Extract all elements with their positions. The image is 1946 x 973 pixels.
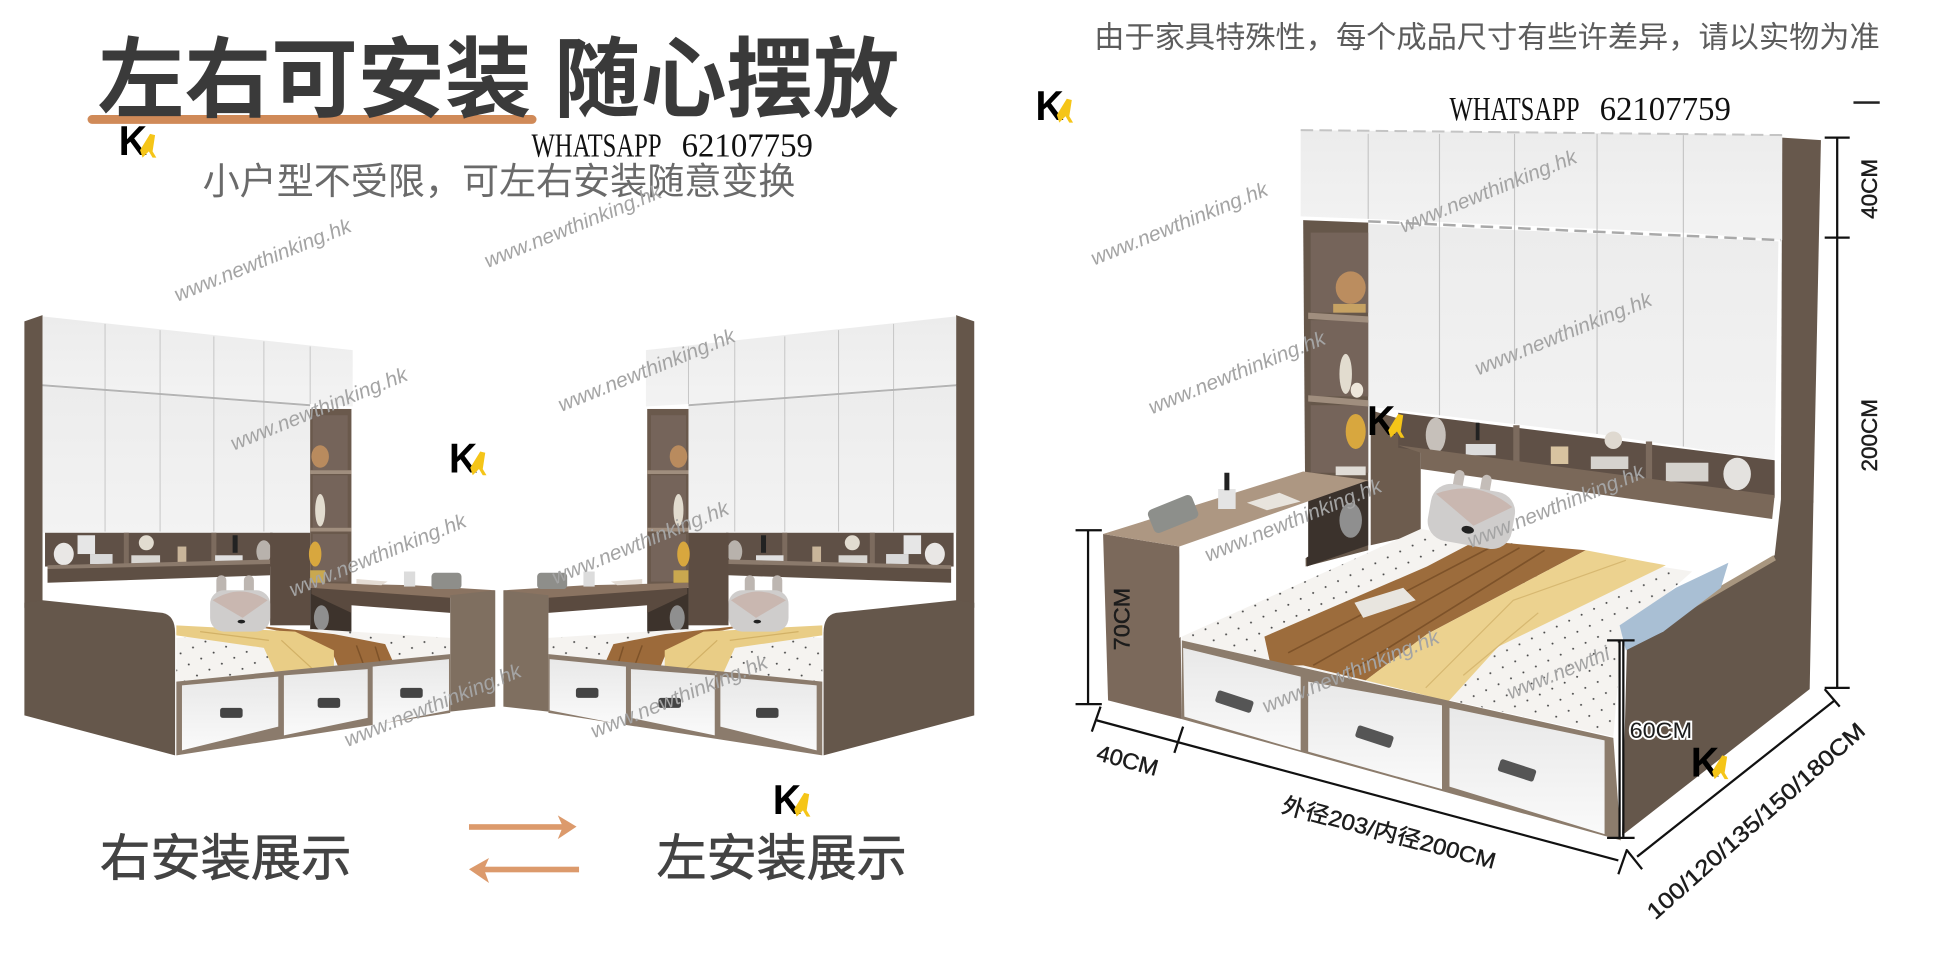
shelf niche <box>45 533 289 583</box>
watermark text group: www.newthinking.hk <box>171 214 356 306</box>
logo 4: K <box>773 777 801 823</box>
watermark text group: www.newthinking.hk <box>286 509 471 602</box>
desk <box>1103 471 1368 719</box>
watermark text group: www.newthinking.hk <box>481 180 666 273</box>
logo 5: K <box>1367 398 1395 444</box>
blue pillows <box>1620 563 1728 650</box>
text: size disclaimer: 由于家具特殊性，每个成品尺寸有些许差异，请以实物为准 <box>1094 22 1880 55</box>
top cabinet <box>43 316 353 406</box>
text: whatsapp left <box>532 127 813 164</box>
text: whatsapp left: 62107759 <box>682 127 813 164</box>
yellow blanket <box>176 625 334 675</box>
desk <box>310 572 495 712</box>
heading: main title: 左右可安装 <box>98 31 532 129</box>
shelf niche <box>1398 413 1775 519</box>
arrow: to right <box>469 815 577 839</box>
heading: main title: 随心摆放 <box>554 31 899 129</box>
dimension label: 40CM top: 40CM <box>1857 159 1882 219</box>
deer pillow <box>1424 466 1521 552</box>
watermark text group: www.newthinking.hk <box>1259 625 1444 718</box>
text: whatsapp left: WHATSAPP <box>532 127 662 164</box>
watermark text group: www.newthinking.hk <box>1464 460 1649 553</box>
top cabinet <box>1301 130 1782 240</box>
drawer frame <box>1182 640 1621 840</box>
text: subtitle: 小户型不受限，可左右安装随意变换 <box>203 160 795 202</box>
tall side post <box>24 315 43 608</box>
illustration: right-install bed <box>24 315 495 755</box>
side panel <box>24 600 175 755</box>
heading: title underline <box>88 115 537 124</box>
text: whatsapp right: 62107759 <box>1600 91 1731 128</box>
under-desk recess <box>1307 473 1368 567</box>
brown blanket <box>1264 540 1586 680</box>
arrow: to left <box>469 858 579 883</box>
drawers <box>182 659 449 750</box>
deer pillow <box>210 575 270 632</box>
logo 3: K <box>1036 83 1064 129</box>
text: whatsapp right: WHATSAPP <box>1449 91 1580 128</box>
watermark text group: www.newthinking.hk <box>1145 326 1330 419</box>
mattress <box>176 629 450 685</box>
dimension label: 70CM: 70CM <box>1109 588 1134 650</box>
brown blanket <box>244 624 395 672</box>
under-desk recess <box>310 588 351 633</box>
dimension lines <box>1076 138 1850 874</box>
watermark text group: www.newthinking.hk <box>587 650 773 743</box>
watermark text group: www.newthi <box>1504 641 1614 704</box>
bookcase column <box>1303 220 1368 567</box>
dimension label: 40CM depth: 40CM <box>1094 740 1161 781</box>
yellow blanket <box>1366 550 1666 702</box>
watermark text group: www.newthinking.hk <box>1396 145 1582 238</box>
drawers <box>1183 648 1605 834</box>
dimension label: length: 外径203/内径200CM <box>1279 793 1498 874</box>
watermark text group: www.newthinking.hk <box>549 496 734 589</box>
watermark text group: www.newthinking.hk <box>1201 474 1387 567</box>
watermark text group: www.newthinking.hk <box>1472 287 1657 380</box>
side panel <box>1622 500 1813 835</box>
dimension label: 200CM: 200CM <box>1857 399 1882 471</box>
dimension label: 60CM: 60CM <box>1630 718 1692 743</box>
tall back panel <box>1781 138 1821 503</box>
centre column <box>270 533 310 625</box>
illustration: left-install bed (mirrored) <box>503 315 974 755</box>
dimension label: widths: 100/120/135/150/180CM <box>1642 718 1870 924</box>
centre column <box>1371 410 1421 545</box>
logo 2: K <box>449 436 477 482</box>
illustration: dimensioned bed <box>1103 130 1821 840</box>
text: whatsapp right <box>1449 91 1731 128</box>
mattress <box>1182 529 1692 737</box>
lower wardrobe doors <box>43 386 310 533</box>
lower wardrobe doors <box>1368 224 1778 460</box>
watermark text group: www.newthinking.hk <box>341 659 526 752</box>
watermark text group <box>171 145 1657 752</box>
heading: right install label: 右安装展示 <box>100 830 351 886</box>
decorative tick top right <box>1853 101 1880 104</box>
watermark text group: www.newthinking.hk <box>227 363 412 455</box>
bookcase column <box>309 409 351 585</box>
drawer frame <box>176 654 450 755</box>
logo 1: K <box>119 118 147 164</box>
heading: left install label: 左安装展示 <box>657 830 907 886</box>
open book <box>1354 588 1416 618</box>
heading: main title <box>98 31 899 129</box>
watermark text group: www.newthinking.hk <box>555 324 740 416</box>
logo 6: K <box>1691 740 1719 786</box>
watermark text group: www.newthinking.hk <box>1088 177 1273 270</box>
